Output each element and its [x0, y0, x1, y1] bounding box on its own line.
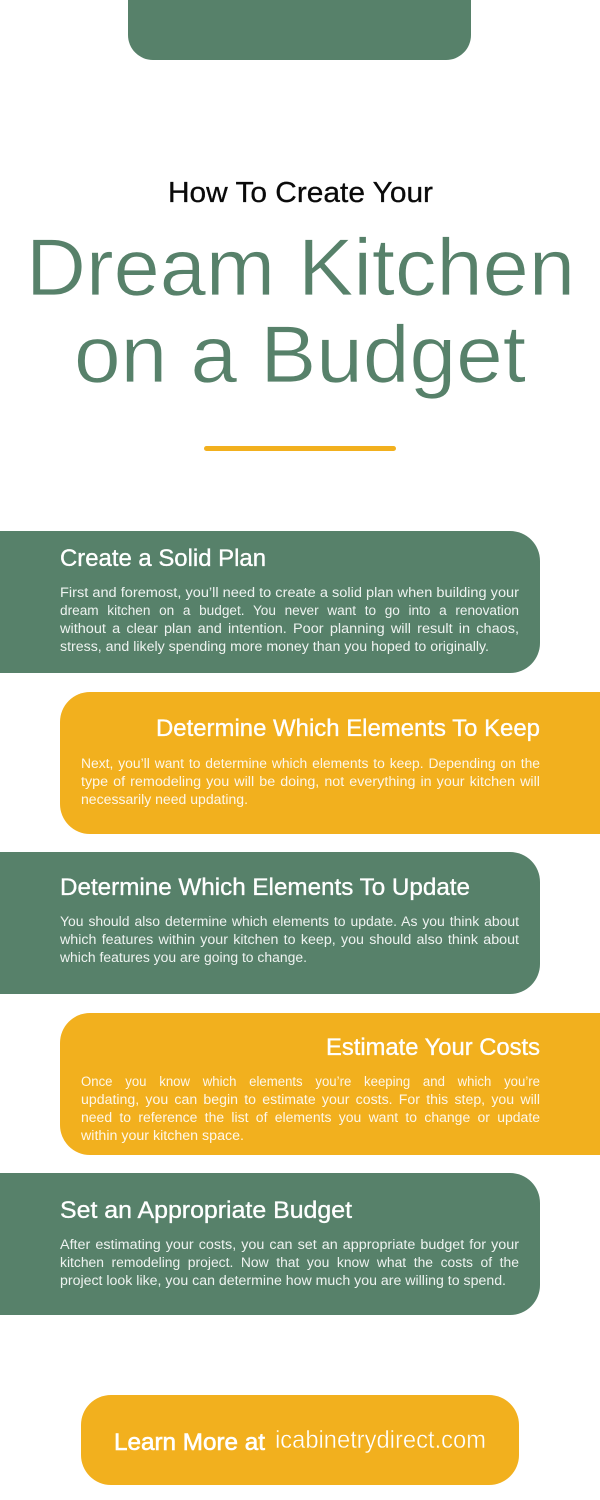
body text: You should also determine which elements to update. As you think about [60, 914, 519, 929]
subtitle: How To Create Your [168, 177, 433, 209]
body text: updating, you can begin to estimate your costs. For this step, you will [81, 1092, 540, 1107]
panel: elements to update [0, 852, 540, 994]
panel: set an appropriate budget [0, 1173, 540, 1315]
panel: estimate your costs [60, 1013, 600, 1155]
top green tab [128, 0, 471, 60]
heading: Determine Which Elements To Update [60, 874, 470, 901]
body text: need to reference the list of elements you want to change or update [81, 1110, 540, 1125]
body text: within your kitchen space. [80, 1128, 244, 1143]
body text [80, 1074, 540, 1143]
body text: stress, and likely spending more money than you hoped to originally. [60, 639, 489, 654]
body text: First and foremost, you’ll need to create a solid plan when building your [60, 585, 520, 600]
body text: Once you know which elements you’re keeping and which you’re [81, 1074, 540, 1089]
body text [81, 756, 540, 807]
yellow divider [204, 446, 396, 451]
heading: Estimate Your Costs [326, 1034, 540, 1061]
body text: which features within your kitchen to keep, you should also think about [59, 932, 519, 947]
panel: create a solid plan [0, 531, 540, 673]
main title line 2: on a Budget [74, 310, 526, 400]
body text: project look like, you can determine how much you are willing to spend. [60, 1273, 506, 1288]
body text: which features you are going to change. [59, 950, 307, 965]
body text: type of remodeling you will be doing, not everything in your kitchen will [81, 774, 540, 789]
body text [60, 1237, 520, 1288]
body text [59, 914, 519, 965]
body text: Next, you’ll want to determine which elements to keep. Depending on the [81, 756, 540, 771]
title block [26, 177, 575, 400]
heading: Determine Which Elements To Keep [156, 715, 540, 742]
body text: without a clear plan and intention. Poor planning will result in chaos, [59, 621, 519, 636]
heading: Set an Appropriate Budget [60, 1197, 352, 1224]
website url: icabinetrydirect.com [275, 1426, 486, 1454]
heading: Create a Solid Plan [60, 545, 266, 572]
learn more label: Learn More at [114, 1429, 265, 1456]
body text: necessarily need updating. [81, 792, 248, 807]
body text: After estimating your costs, you can set an appropriate budget for your [60, 1237, 520, 1252]
main title line 1: Dream Kitchen [26, 223, 575, 313]
call to action button [81, 1395, 519, 1485]
body text: dream kitchen on a budget. You never want to go into a renovation [60, 603, 519, 618]
panel: elements to keep [60, 692, 600, 834]
body text [59, 585, 520, 654]
body text: kitchen remodeling project. Now that you know what the costs of the [60, 1255, 519, 1270]
